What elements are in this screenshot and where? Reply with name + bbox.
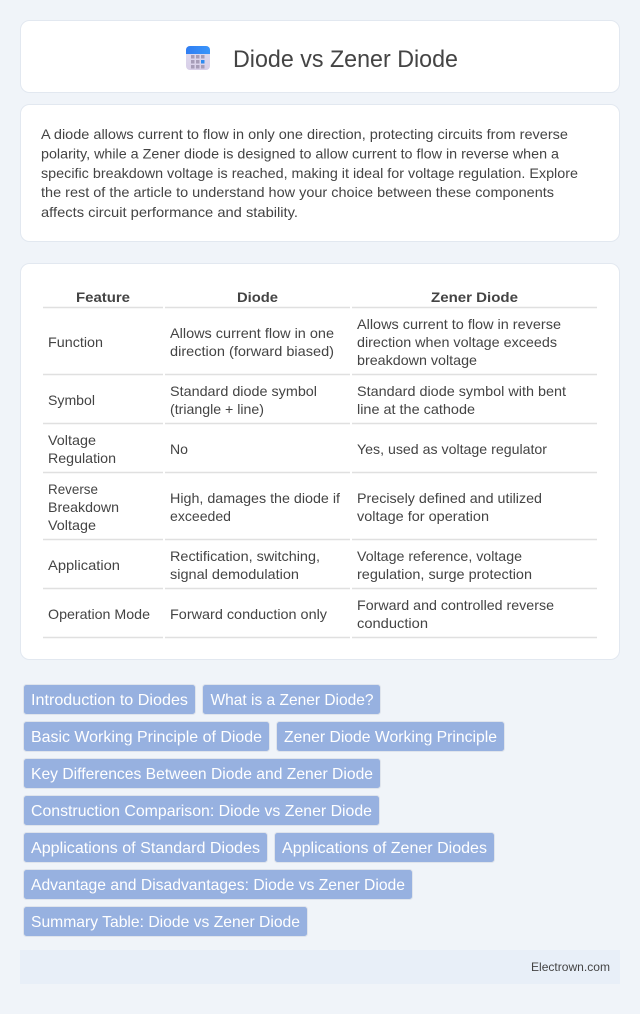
row: application: Application	[48, 557, 120, 573]
row: reverse breakdown voltage: exceeded	[170, 508, 231, 524]
row: reverse breakdown voltage: Reverse	[48, 481, 98, 497]
table header: Zener Diode	[431, 289, 518, 305]
row: application: signal demodulation	[170, 566, 299, 582]
row: application	[48, 548, 532, 582]
row: application: Rectification, switching,	[170, 548, 320, 564]
tag: Key Differences Between Diode and Zener Diode: Key Differences Between Diode and Zener Diode	[31, 766, 373, 783]
text block: intro paragraph: affects circuit performance and stability.	[41, 204, 298, 220]
row: symbol: Standard diode symbol with bent	[357, 383, 566, 399]
row: function: Allows current to flow in reverse	[357, 316, 561, 332]
row: reverse breakdown voltage: Breakdown	[48, 499, 119, 515]
title: Diode vs Zener Diode	[233, 46, 458, 73]
text block: intro paragraph	[41, 126, 578, 220]
tag: Basic Working Principle of Diode: Basic Working Principle of Diode	[31, 729, 262, 746]
row: function: direction (forward biased)	[170, 343, 334, 359]
row: operation mode: conduction	[357, 615, 428, 631]
footer: Electrown.com	[531, 960, 610, 974]
tag: Zener Diode Working Principle: Zener Diode Working Principle	[284, 729, 497, 746]
row: symbol: (triangle + line)	[170, 401, 264, 417]
row: function	[48, 316, 561, 368]
tag: Applications of Standard Diodes	[24, 832, 268, 862]
row: voltage regulation: Regulation	[48, 450, 116, 466]
row: application: regulation, surge protection	[357, 566, 532, 582]
row: voltage regulation: Voltage	[48, 432, 96, 448]
row: function: Allows current flow in one	[170, 325, 334, 341]
row: operation mode: Forward and controlled reverse	[357, 597, 554, 613]
row: symbol: line at the cathode	[357, 401, 475, 417]
row: reverse breakdown voltage: Voltage	[48, 517, 96, 533]
text block: intro paragraph: the rest of the article to understand how your choice between these components	[41, 184, 554, 200]
row: reverse breakdown voltage: Precisely defined and utilized	[357, 490, 542, 506]
footer	[20, 950, 620, 984]
tag: Introduction to Diodes	[24, 684, 196, 714]
row: function: Function	[48, 334, 103, 350]
text block: intro paragraph: polarity, while a Zener diode is designed to allow current to flow in reverse when a	[41, 146, 559, 162]
tag: Zener Diode Working Principle	[276, 722, 504, 752]
row: voltage regulation: No	[170, 441, 188, 457]
tag: Applications of Zener Diodes	[274, 832, 494, 862]
panel: header	[20, 20, 620, 92]
panel: comparison table	[20, 264, 620, 660]
tag: Construction Comparison: Diode vs Zener Diode	[24, 796, 380, 826]
panel: introduction	[20, 104, 620, 242]
row: application: Voltage reference, voltage	[357, 548, 522, 564]
tag: Basic Working Principle of Diode	[24, 722, 270, 752]
row: reverse breakdown voltage	[48, 481, 542, 533]
tag: Introduction to Diodes: Introduction to Diodes	[31, 692, 188, 709]
row: symbol: Standard diode symbol	[170, 383, 317, 399]
row: voltage regulation: Yes, used as voltage regulator	[357, 441, 547, 457]
row: operation mode: Operation Mode	[48, 606, 150, 622]
row: operation mode: Forward conduction only	[170, 606, 327, 622]
row: symbol: Symbol	[48, 392, 95, 408]
table header: Feature	[76, 289, 130, 305]
tag: Applications of Zener Diodes: Applications of Zener Diodes	[282, 840, 487, 857]
tag: Key Differences Between Diode and Zener Diode	[24, 758, 380, 788]
tag: What is a Zener Diode?	[202, 684, 380, 714]
panel: topic tags	[24, 684, 504, 936]
row: function: breakdown voltage	[357, 352, 477, 368]
row: operation mode	[48, 597, 554, 631]
table header	[76, 289, 518, 305]
row: function: direction when voltage exceeds	[357, 334, 557, 350]
tag: Advantage and Disadvantages: Diode vs Zener Diode	[24, 870, 412, 900]
tag: Advantage and Disadvantages: Diode vs Zener Diode: Advantage and Disadvantages: Diode vs Zener Diode	[31, 877, 405, 894]
row: reverse breakdown voltage: voltage for operation	[357, 508, 489, 524]
tag: Construction Comparison: Diode vs Zener Diode: Construction Comparison: Diode vs Zener Diode	[31, 803, 372, 820]
text block: intro paragraph: specific breakdown voltage is reached, making it ideal for voltage regulation. Explore	[41, 165, 578, 181]
icon: calendar	[186, 46, 210, 70]
tag: Summary Table: Diode vs Zener Diode	[24, 906, 308, 936]
table header: Diode	[237, 289, 278, 305]
text block: intro paragraph: A diode allows current to flow in only one direction, protecting circuits from reverse	[41, 126, 568, 142]
tag: Summary Table: Diode vs Zener Diode: Summary Table: Diode vs Zener Diode	[31, 914, 300, 931]
row: voltage regulation	[48, 432, 547, 466]
tag: What is a Zener Diode?: What is a Zener Diode?	[210, 692, 374, 709]
row: reverse breakdown voltage: High, damages the diode if	[170, 490, 340, 506]
tag: Applications of Standard Diodes: Applications of Standard Diodes	[31, 840, 260, 857]
row: symbol	[48, 383, 566, 417]
